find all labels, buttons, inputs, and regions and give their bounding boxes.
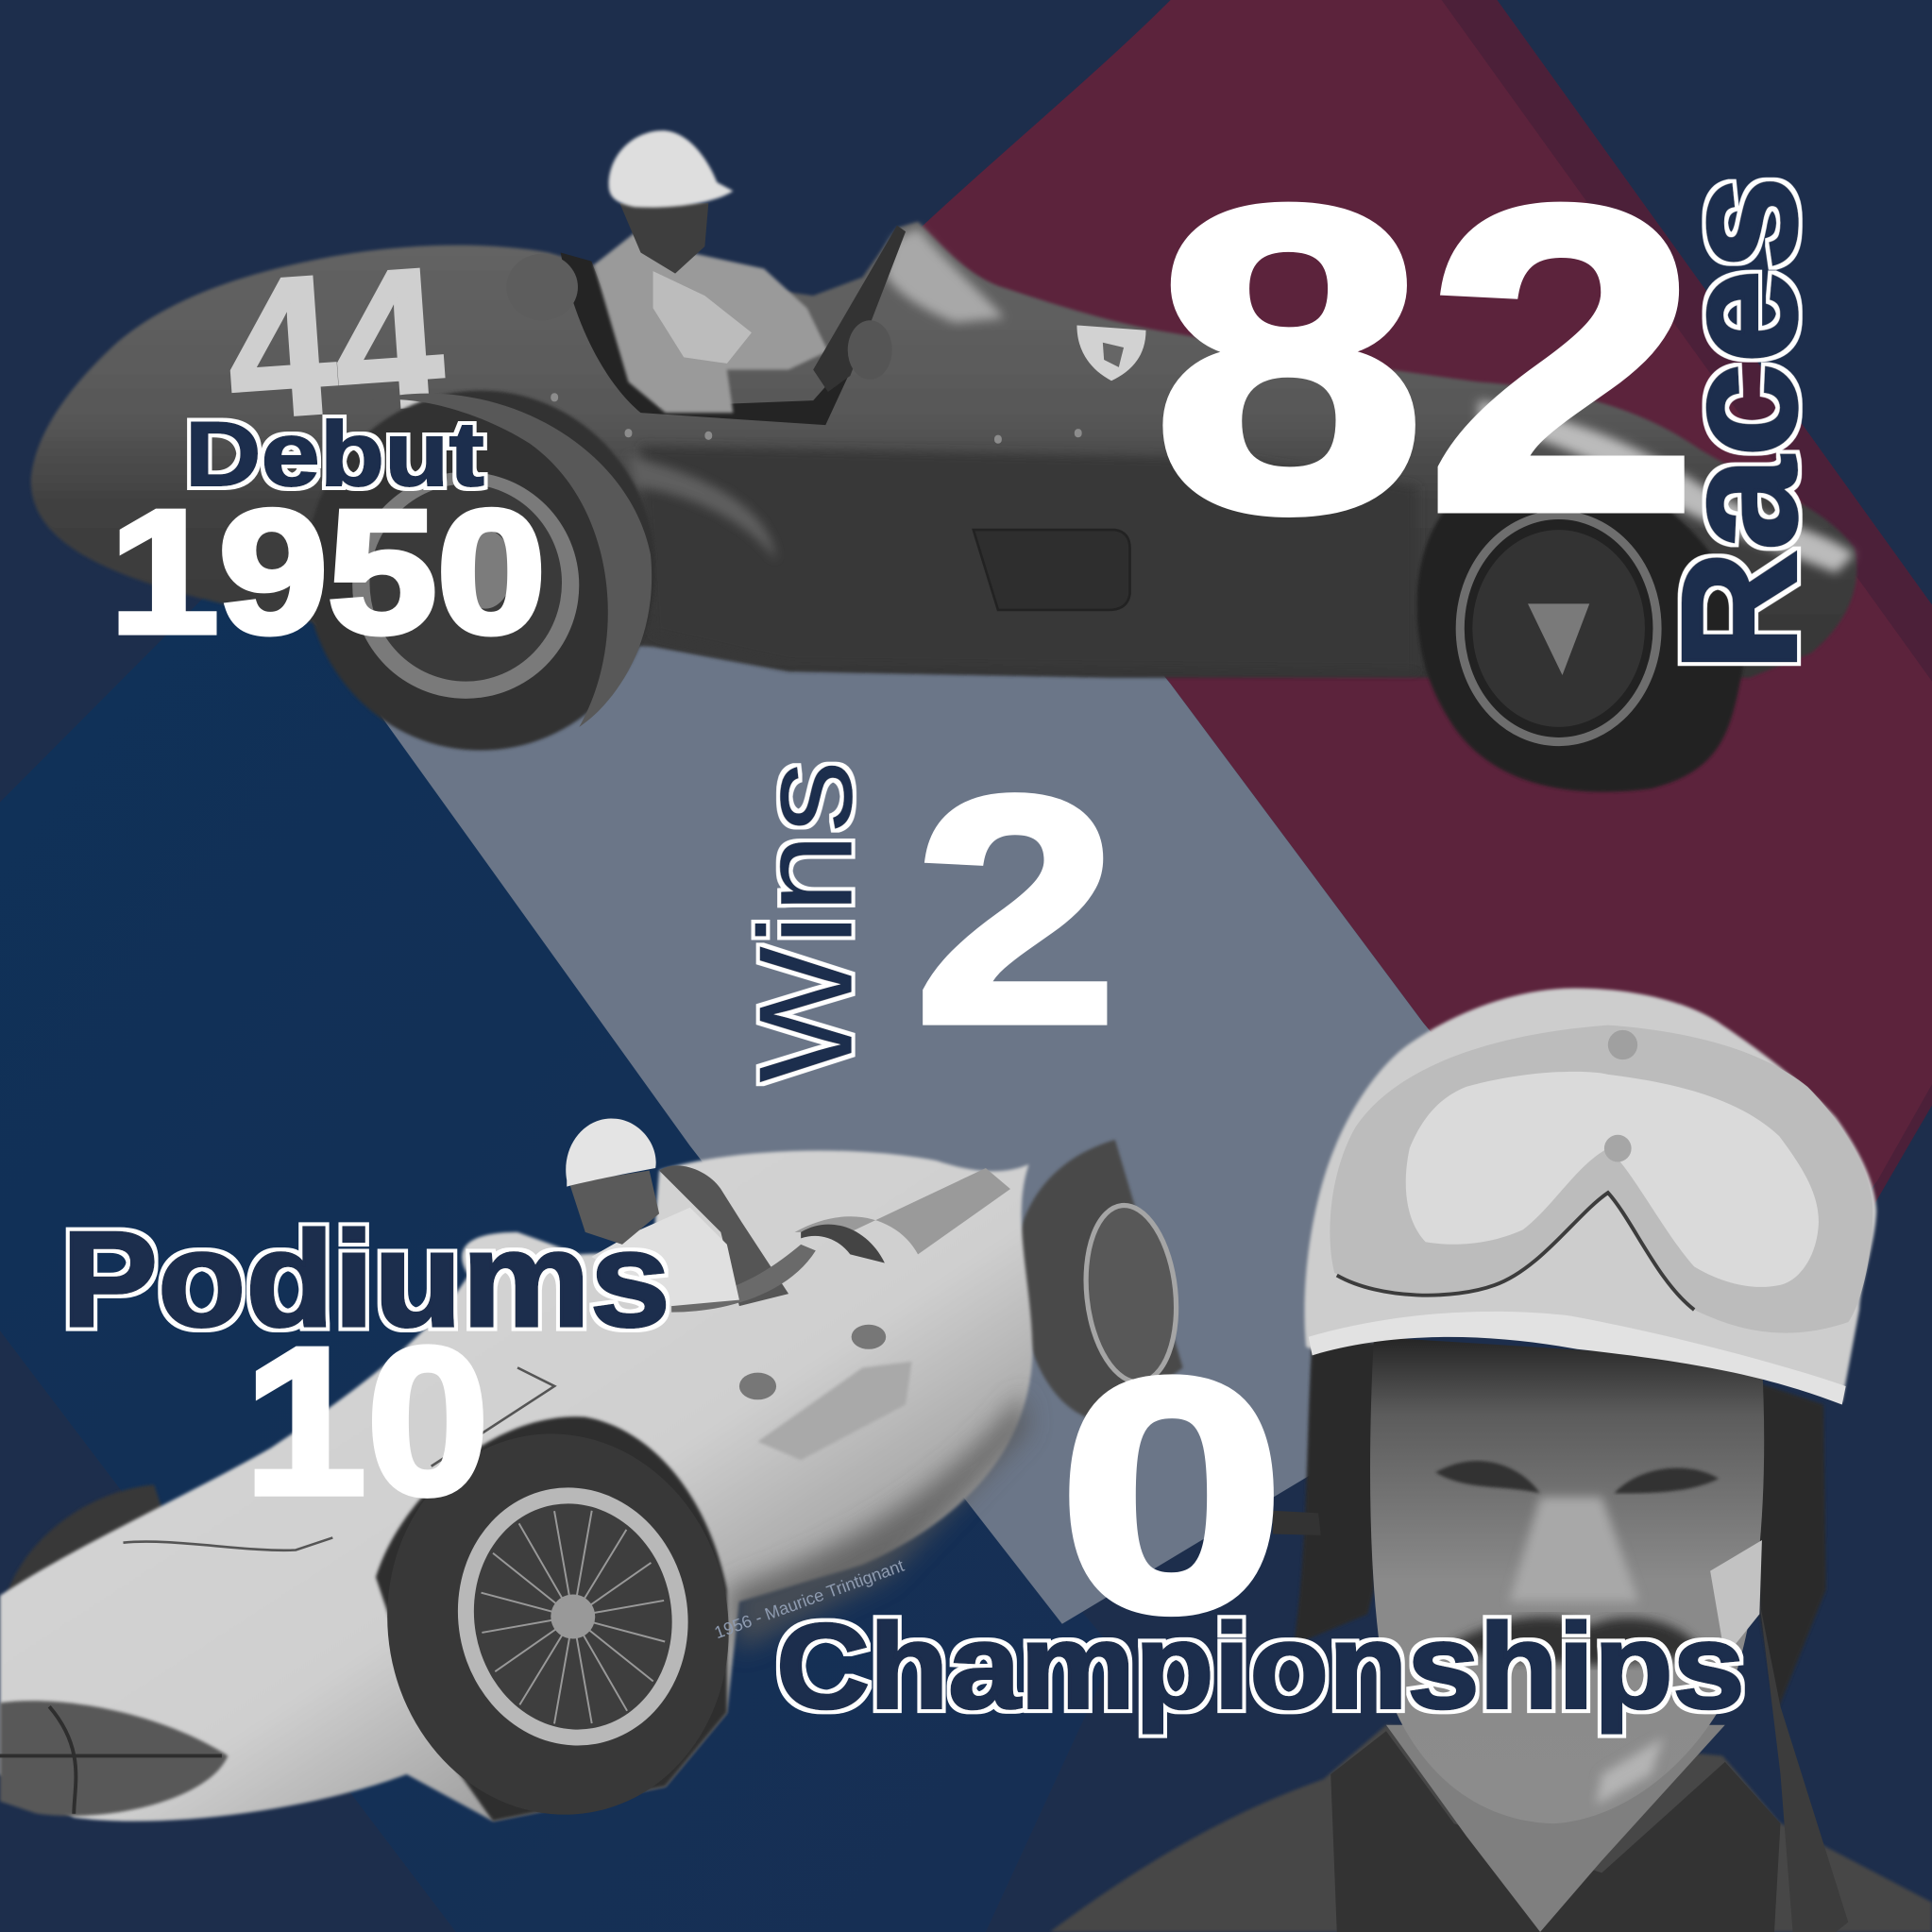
hood fold [795,1168,1010,1254]
cockpit rim [671,1245,816,1313]
rear wheel [1016,1140,1184,1423]
body [0,1150,1032,1822]
band: grey [283,530,1516,1624]
cockpit [561,252,862,425]
moustache [1448,1617,1706,1665]
rear wheel [1417,463,1744,792]
ferrari shield [1076,325,1146,381]
body seam rivets [554,397,1078,440]
number: 1950: 1950 [110,474,546,669]
car: light racer (bottom left) [0,1118,1184,1841]
driver [566,1118,739,1306]
face [1370,1337,1764,1823]
steering wheel [813,226,906,392]
filler caps [852,1325,886,1349]
number: 10: 10 [244,1304,489,1538]
seat back [659,1165,788,1306]
wheel arch shadow [376,1416,727,1822]
car body [31,222,1856,678]
number: 2: 2 [914,731,1117,1091]
faint caption: 1956 - Maurice Trintignant [712,1555,907,1642]
neck [1386,1725,1725,1932]
side vent [974,530,1130,610]
stat: 0 championships [776,1311,1745,1735]
portrait: driver in helmet and goggles [1050,988,1932,1932]
car: number 44 racer (top) [31,130,1856,792]
fender highlight [628,456,776,561]
neck strap [1759,1602,1848,1932]
goggles [1330,1025,1873,1333]
label: Races: Races [1649,177,1830,671]
nose and cheek light [1509,1497,1638,1602]
helmet [609,130,733,208]
stat: 10 podiums [61,1204,670,1538]
label: Championships: Championships [776,1600,1745,1735]
helmet shell [1304,988,1876,1402]
eyes [1435,1461,1719,1493]
label: Debut: Debut [185,404,484,505]
headrest [506,254,578,320]
front wheel [358,1407,758,1841]
worn paint [757,1362,912,1460]
helmet flaps [1294,1337,1380,1645]
driver [594,130,906,413]
front intake [0,1701,228,1816]
number: 82: 82 [1152,117,1699,602]
stat: 2 wins [731,731,1117,1091]
cowl highlight [885,228,1004,323]
front wheel [306,391,655,751]
shirt [1050,1725,1932,1932]
label: Wins: Wins [731,760,880,1083]
lower body shadow [641,446,1417,671]
stat: debut 1950 [110,404,546,669]
ear strap [1273,1511,1321,1535]
label: Podiums: Podiums [61,1204,670,1355]
stat: 82 races [1152,117,1830,671]
collar [1330,1731,1781,1932]
band: blue [0,512,1115,1932]
number: 0: 0 [1059,1311,1285,1680]
panel line [123,1367,554,1551]
rear shadow tyre [7,1484,166,1596]
lower shade [727,1392,1029,1651]
number 44: 44 [220,227,449,461]
visor edge [1309,1312,1846,1405]
rear body highlight [1479,400,1855,573]
band: maroon [862,0,1932,1392]
